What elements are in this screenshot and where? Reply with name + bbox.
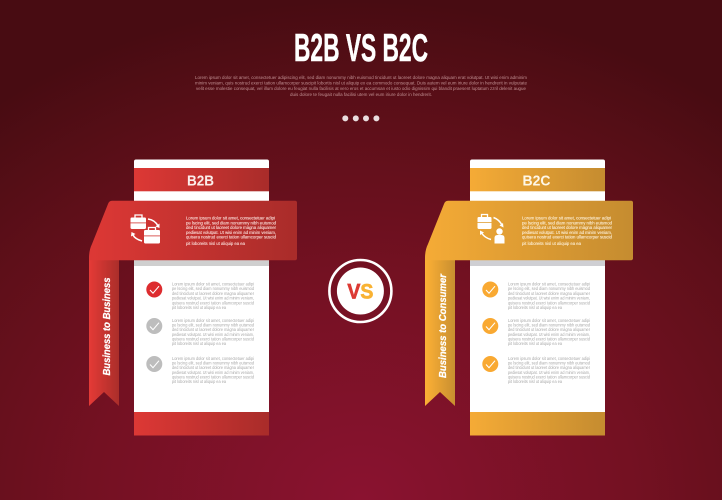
B2B ribbon (89, 260, 119, 406)
B2C ribbon (425, 260, 455, 406)
item 1 (482, 282, 591, 310)
banner description: Lorem ipsum dolor sit amet, consectetuer adipi (186, 216, 275, 220)
item 1: pit loboreits nisl ut aliquip ea ea (508, 305, 563, 310)
item 2: ded tincidunt ut laoreet dolore magna aliquamer (508, 327, 591, 332)
banner description: ded tincidunt ut laoreet dolore magna aliquamer (186, 225, 277, 230)
banner description (186, 216, 277, 246)
item 3: pediesat volutpat. Ut wisi enim ad minim veniam, (172, 370, 254, 375)
checklist (482, 282, 591, 384)
item 1: pe lscing elit, sed diam nonummy nibh euismod (508, 286, 591, 291)
item 2: Lorem ipsum dolor sit amet, consectetuer adipi (508, 318, 590, 323)
item 3 (482, 356, 591, 384)
intro paragraph: minim veniam, quis nostrud exerci tation ullamcorper suscipit lobortis nisl ut aliquip ex ea commodo consequat. Duis autem vel eum iriure dolor in hendrerit in vulputate (195, 81, 527, 86)
item 2: quisera nostrud exerci tation ullamcorper suscid (508, 337, 591, 342)
banner description: pit loboreits nisl ut aliquip ea ea (186, 241, 246, 246)
banner description: pediesat volutpat. Ut wisi enim ad minim veniam, (186, 230, 276, 235)
item 2: pe lscing elit, sed diam nonummy nibh euismod (508, 322, 591, 328)
item 2: pediesat volutpat. Ut wisi enim ad minim veniam, (172, 332, 254, 337)
item 2: pit loboreits nisl ut aliquip ea ea (508, 341, 563, 346)
B2B footer band (134, 412, 269, 436)
item 2: pediesat volutpat. Ut wisi enim ad minim veniam, (508, 332, 590, 337)
item 2: quisera nostrud exerci tation ullamcorper suscid (172, 337, 255, 342)
item 1: pediesat volutpat. Ut wisi enim ad minim veniam, (172, 296, 254, 301)
banner description: pe lscing elit, sed diam nonummy nibh euismod (522, 220, 613, 225)
panel: B2C (425, 160, 633, 436)
B2C header band (470, 168, 605, 191)
item 1: quisera nostrud exerci tation ullamcorper suscid (508, 300, 591, 305)
item 3: ded tincidunt ut laoreet dolore magna aliquamer (172, 365, 255, 370)
B2B heading: B2B (187, 172, 214, 190)
item 2: pit loboreits nisl ut aliquip ea ea (172, 341, 227, 346)
item 3: quisera nostrud exerci tation ullamcorper suscid (508, 375, 591, 380)
intro paragraph: velit esse molestie consequat, vel illum dolore eu feugiat nulla facilisis at vero eros et accumsan et iusto odio dignissim qui blandit praesent luptatum zzril delenit augue (196, 86, 526, 91)
item 3: pediesat volutpat. Ut wisi enim ad minim veniam, (508, 370, 590, 375)
banner shadow (470, 260, 605, 266)
icon: briefcase and person exchange (478, 214, 504, 244)
item 3: quisera nostrud exerci tation ullamcorper suscid (172, 375, 255, 380)
banner description: quisera nostrud exerci tation ullamcorper suscid (522, 235, 613, 240)
pagination dots (342, 115, 379, 121)
intro paragraph: Lorem ipsum dolor sit amet, consectetuer adipiscing elit, sed diam nonummy nibh euismod tincidunt ut laoreet dolore magna aliquam erat volutpat. Ut wisi enim adminim (195, 75, 527, 80)
ribbon label: Business to Business (101, 277, 113, 376)
banner description: pit loboreits nisl ut aliquip ea ea (522, 241, 582, 246)
item 1: pediesat volutpat. Ut wisi enim ad minim veniam, (508, 296, 590, 301)
item 2 (146, 318, 255, 346)
banner description: quisera nostrud exerci tation ullamcorper suscid (186, 235, 277, 240)
item 3: ded tincidunt ut laoreet dolore magna aliquamer (508, 365, 591, 370)
banner description: pe lscing elit, sed diam nonummy nibh euismod (186, 220, 277, 225)
B2C footer band (470, 412, 605, 436)
VS badge (329, 260, 391, 322)
B2C heading: B2C (522, 172, 551, 190)
item 2: pe lscing elit, sed diam nonummy nibh euismod (172, 322, 255, 328)
B2B header band (134, 168, 269, 191)
VS badge: VS (347, 280, 373, 304)
B2B card (134, 160, 269, 435)
item 1: ded tincidunt ut laoreet dolore magna aliquamer (172, 291, 255, 296)
intro paragraph: duis dolore te feugait nulla facilisi utem vel eum iriure dolor in hendrerit. (290, 92, 432, 97)
banner description: Lorem ipsum dolor sit amet, consectetuer adipi (522, 216, 611, 220)
B2B banner (89, 201, 297, 260)
item 1 (146, 282, 255, 310)
title: B2B VS B2C (294, 27, 428, 70)
item 2: ded tincidunt ut laoreet dolore magna aliquamer (172, 327, 255, 332)
checklist (146, 282, 255, 384)
item 1: ded tincidunt ut laoreet dolore magna aliquamer (508, 291, 591, 296)
banner description (522, 216, 613, 246)
ribbon label: Business to Consumer (437, 273, 449, 378)
item 1: Lorem ipsum dolor sit amet, consectetuer adipi (172, 282, 254, 286)
item 3: pit loboreits nisl ut aliquip ea ea (508, 379, 563, 384)
banner description: ded tincidunt ut laoreet dolore magna aliquamer (522, 225, 613, 230)
item 3 (146, 356, 255, 384)
icon: briefcases exchange (130, 215, 160, 244)
intro paragraph (195, 75, 527, 97)
B2C card (470, 160, 605, 435)
banner description: pediesat volutpat. Ut wisi enim ad minim veniam, (522, 230, 612, 235)
item 3: pe lscing elit, sed diam nonummy nibh euismod (508, 360, 591, 366)
item 1: pe lscing elit, sed diam nonummy nibh euismod (172, 286, 255, 291)
item 3: Lorem ipsum dolor sit amet, consectetuer adipi (172, 356, 254, 361)
item 3: Lorem ipsum dolor sit amet, consectetuer adipi (508, 356, 590, 361)
item 3: pe lscing elit, sed diam nonummy nibh euismod (172, 360, 255, 366)
item 1: Lorem ipsum dolor sit amet, consectetuer adipi (508, 282, 590, 286)
panel: B2B (89, 160, 297, 436)
item 1: pit loboreits nisl ut aliquip ea ea (172, 305, 227, 310)
banner shadow (134, 260, 269, 266)
B2C banner (425, 201, 633, 260)
item 1: quisera nostrud exerci tation ullamcorper suscid (172, 300, 255, 305)
item 2: Lorem ipsum dolor sit amet, consectetuer adipi (172, 318, 254, 323)
item 2 (482, 318, 591, 346)
item 3: pit loboreits nisl ut aliquip ea ea (172, 379, 227, 384)
